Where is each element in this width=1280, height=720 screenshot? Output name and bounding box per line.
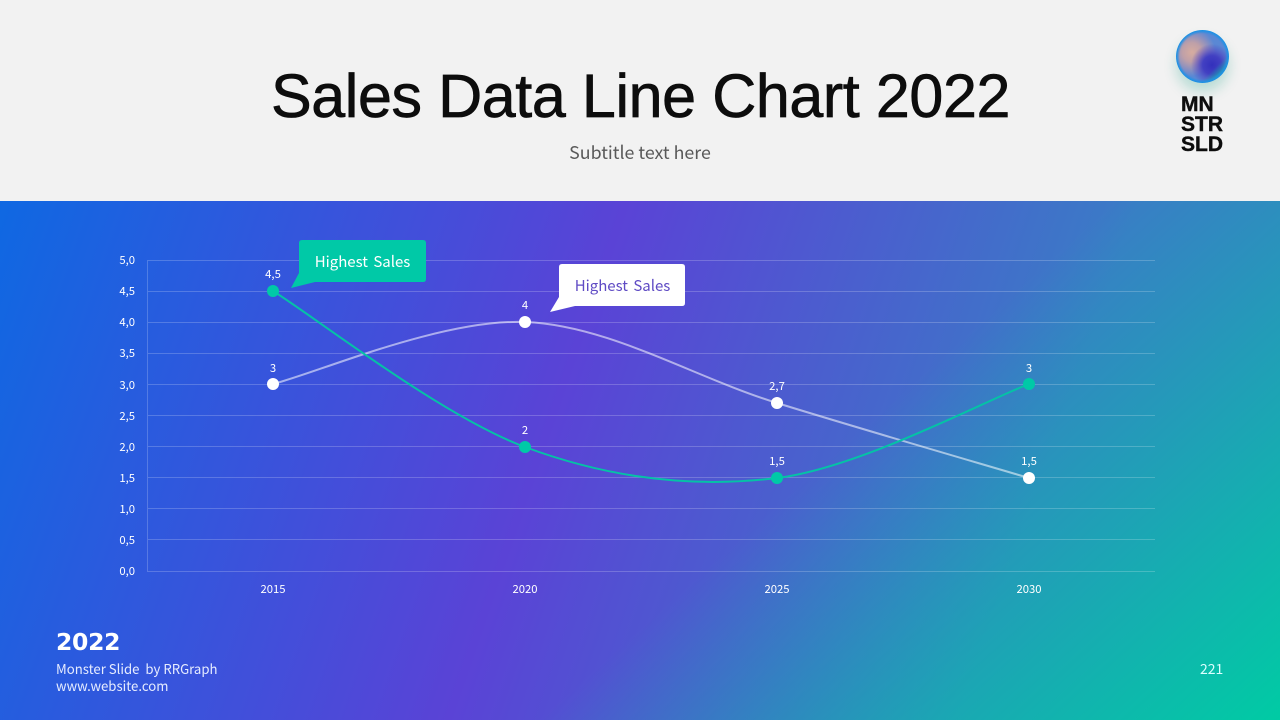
logo wordmark — [1181, 93, 1223, 156]
data labels: 3 — [270, 360, 276, 376]
callout: white highest sales — [550, 264, 685, 312]
y axis labels: 3,0 — [119, 377, 135, 393]
page number: 221 — [1200, 659, 1223, 679]
y axis labels: 2,5 — [119, 408, 135, 424]
callout: white highest sales: Highest Sales — [575, 275, 670, 296]
y axis labels: 3,5 — [119, 345, 135, 361]
gradient chart panel — [0, 201, 1280, 720]
data labels: 2,7 — [769, 378, 785, 394]
x axis labels: 2020 — [512, 581, 538, 597]
footer credit: Monster Slide by RRGraph www.website.com — [56, 659, 218, 694]
y axis labels: 0,0 — [119, 563, 135, 579]
icon: logo sphere — [1176, 30, 1229, 83]
x axis labels: 2030 — [1016, 581, 1042, 597]
data labels: 4,5 — [265, 266, 281, 282]
data labels: 4 — [522, 297, 528, 313]
callout: green highest sales: Highest Sales — [315, 251, 410, 272]
y axis labels: 5,0 — [119, 252, 135, 268]
logo — [1170, 30, 1235, 156]
callout: green highest sales — [291, 240, 426, 288]
header band — [0, 0, 1280, 201]
x axis labels — [260, 581, 1042, 597]
data labels — [265, 266, 1037, 469]
x axis labels: 2015 — [260, 581, 286, 597]
logo wordmark: SLD — [1181, 133, 1223, 156]
series: green line — [267, 285, 1035, 484]
data labels: 1,5 — [1021, 453, 1037, 469]
y axis labels: 4,0 — [119, 314, 135, 330]
x axis labels: 2025 — [764, 581, 790, 597]
y axis labels: 2,0 — [119, 439, 135, 455]
logo wordmark: STR — [1181, 113, 1223, 136]
title: Sales Data Line Chart 2022 — [271, 62, 1010, 130]
y axis labels: 1,5 — [119, 470, 135, 486]
y axis labels: 0,5 — [119, 532, 135, 548]
data labels: 2 — [522, 422, 528, 438]
y axis labels: 4,5 — [119, 283, 135, 299]
data labels: 3 — [1026, 360, 1032, 376]
y axis labels: 1,0 — [119, 501, 135, 517]
logo wordmark: MN — [1181, 93, 1214, 116]
footer year: 2022 — [56, 628, 120, 656]
subtitle: Subtitle text here — [569, 139, 711, 165]
series: white line — [267, 316, 1035, 484]
y axis labels — [119, 252, 135, 579]
data labels: 1,5 — [769, 453, 785, 469]
